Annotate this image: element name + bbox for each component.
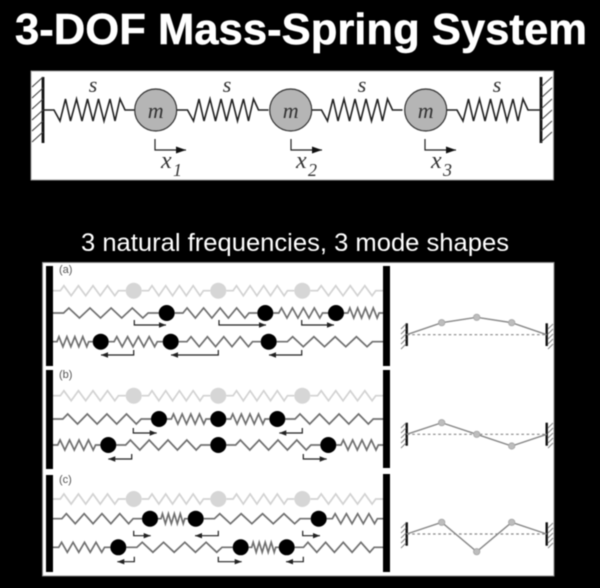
title: 3-DOF Mass-Spring System bbox=[15, 5, 587, 54]
displacement x2 bbox=[291, 139, 322, 180]
mode shape a bbox=[401, 314, 553, 349]
stiffness labels: s bbox=[493, 72, 501, 97]
mass 2 bbox=[270, 89, 312, 131]
stiffness labels bbox=[89, 72, 501, 97]
mass 1 bbox=[135, 89, 177, 131]
panel: mass-spring diagram bbox=[31, 71, 554, 180]
row a: first mode animation: (a) bbox=[59, 264, 72, 276]
row b: second mode animation bbox=[46, 369, 390, 469]
subtitle: 3 natural frequencies, 3 mode shapes bbox=[81, 229, 509, 257]
displacement x2: 2 bbox=[308, 160, 317, 180]
mass 1: m bbox=[148, 98, 164, 123]
mass 3 bbox=[405, 89, 447, 131]
mass 3: m bbox=[418, 98, 434, 123]
displacement x3: 3 bbox=[442, 160, 452, 180]
icon: left fixed wall bbox=[32, 77, 43, 143]
displacement x1: x bbox=[160, 148, 172, 174]
displacement x2: x bbox=[295, 148, 307, 174]
panel: mode shapes bbox=[42, 262, 554, 576]
displacement x3 bbox=[425, 139, 456, 180]
mass 2: m bbox=[283, 98, 299, 123]
springs bbox=[43, 99, 541, 121]
displacement x1 bbox=[155, 139, 186, 180]
icon: right fixed wall bbox=[541, 77, 552, 143]
mode shape c bbox=[401, 519, 553, 555]
displacement x3: x bbox=[430, 148, 442, 174]
row a: first mode animation bbox=[46, 264, 390, 366]
row b: second mode animation: (b) bbox=[59, 369, 72, 381]
mode shape b bbox=[401, 420, 553, 449]
stiffness labels: s bbox=[223, 72, 231, 97]
stiffness labels: s bbox=[89, 72, 97, 97]
row c: third mode animation bbox=[46, 474, 390, 572]
stiffness labels: s bbox=[358, 72, 366, 97]
row c: third mode animation: (c) bbox=[59, 474, 72, 486]
displacement x1: 1 bbox=[173, 160, 182, 180]
